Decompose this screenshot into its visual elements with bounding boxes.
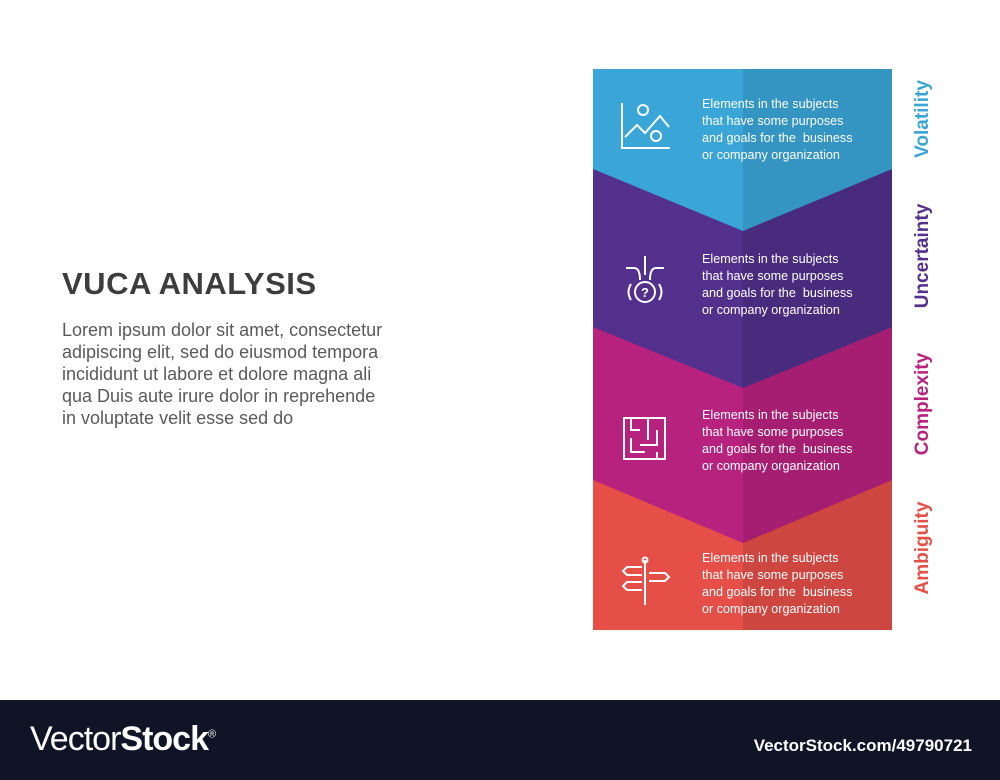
text: volatility: Elements in the subjects [702, 97, 839, 111]
text: volatility [702, 97, 853, 162]
text: ambiguity: Elements in the subjects [702, 551, 839, 565]
footer id: VectorStock.com/49790721 [754, 736, 972, 755]
description text: incididunt ut labore et dolore magna ali [62, 364, 371, 384]
text: uncertainty: or company organization [702, 303, 840, 317]
text: volatility: or company organization [702, 148, 840, 162]
title: VUCA ANALYSIS [62, 266, 317, 301]
text: complexity: and goals for the business [702, 442, 853, 456]
footer logo: VectorStock® [30, 720, 215, 758]
label: Complexity: Complexity [912, 353, 933, 455]
band: volatility [593, 69, 892, 231]
footer bar [0, 700, 1000, 780]
band: complexity [593, 320, 892, 543]
description text: adipiscing elit, sed do eiusmod tempora [62, 342, 378, 362]
icon: chart [622, 103, 670, 148]
text: volatility: and goals for the business [702, 131, 853, 145]
description text: qua Duis aute irure dolor in reprehende [62, 386, 375, 406]
description text: Lorem ipsum dolor sit amet, consectetur [62, 320, 382, 340]
label: Uncertainty: Uncertainty [912, 204, 933, 308]
text: complexity: Elements in the subjects [702, 408, 839, 422]
icon: signpost [623, 558, 669, 605]
icon: maze [624, 418, 665, 459]
text: ambiguity: and goals for the business [702, 585, 853, 599]
text: complexity [702, 408, 853, 473]
description text [62, 320, 382, 428]
text: ambiguity [702, 551, 853, 616]
text: complexity: or company organization [702, 459, 840, 473]
text: uncertainty [702, 252, 853, 317]
label: Volatility: Volatility [912, 80, 933, 158]
text: uncertainty: Elements in the subjects [702, 252, 839, 266]
label: Ambiguity: Ambiguity [912, 502, 933, 594]
text: ambiguity: or company organization [702, 602, 840, 616]
icon: question paths: ? [641, 285, 649, 300]
text: volatility: that have some purposes [702, 114, 843, 128]
icon: question paths [626, 256, 664, 302]
text: uncertainty: and goals for the business [702, 286, 853, 300]
text: uncertainty: that have some purposes [702, 269, 843, 283]
band: ambiguity [593, 470, 892, 630]
band: uncertainty [593, 160, 892, 388]
text: complexity: that have some purposes [702, 425, 843, 439]
text: ambiguity: that have some purposes [702, 568, 843, 582]
description text: in voluptate velit esse sed do [62, 408, 293, 428]
